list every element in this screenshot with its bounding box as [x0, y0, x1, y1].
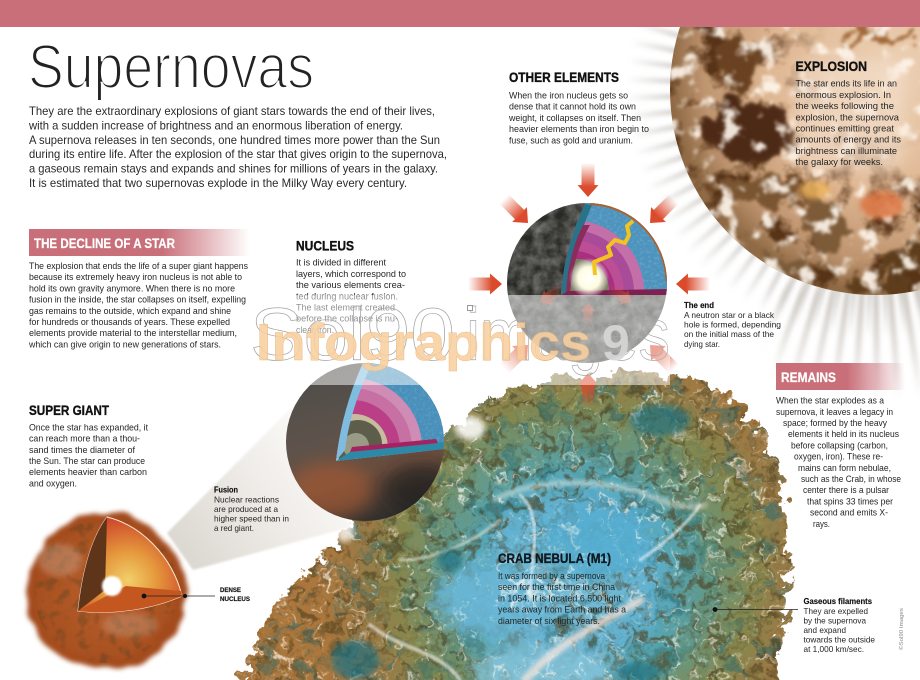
- body text: seen for the first time in China: [498, 581, 616, 592]
- body text: and oxygen.: [29, 477, 77, 488]
- body text: elements provide material to the interstellar medium,: [29, 327, 237, 338]
- body text: the galaxy for weeks.: [796, 156, 883, 167]
- grey numeral: 9: [602, 315, 630, 371]
- body text: explosion, the supernova: [796, 111, 900, 122]
- body text: [796, 78, 901, 167]
- label: gaseous filaments: at 1,000 km/sec.: [804, 644, 864, 654]
- body text: oxygen, iron). These re-: [794, 451, 883, 462]
- label: fusion: are produced at a: [214, 504, 278, 514]
- wedge layers: [336, 364, 444, 461]
- wedge walls: [336, 365, 370, 461]
- outlined watermark word: images: [466, 293, 670, 376]
- body text: elements heavier than carbon: [29, 466, 147, 477]
- intro text block: a gaseous remain stays and expands and shines for millions of years in the galaxy.: [29, 162, 438, 176]
- panel: other elements text: [508, 70, 649, 145]
- intro text block: They are the extraordinary explosions of giant stars towards the end of their lives,: [29, 105, 435, 118]
- body text: [776, 395, 901, 529]
- label: the end: hole is formed, depending: [684, 320, 781, 330]
- blue core: [435, 500, 653, 680]
- body text: mains can form nebulae,: [798, 462, 891, 473]
- body text: hold its own gravity anymore. When there is no more: [29, 282, 235, 293]
- label: gaseous filaments: towards the outside: [804, 635, 875, 645]
- credit: ©Sol90 Images: [898, 608, 905, 650]
- body text: [508, 90, 649, 145]
- body text: because its extremely heavy iron nucleus is not able to: [29, 271, 242, 282]
- label: fusion: a red giant.: [214, 523, 254, 533]
- super giant star cutaway: [27, 512, 215, 670]
- body text: second and emits X-: [810, 507, 888, 518]
- body text: diameter of six light years.: [498, 615, 600, 626]
- body text: It was formed by a supernova: [498, 570, 606, 581]
- dark brown blotches: [708, 30, 920, 293]
- label: dense nucleus: NUCLEUS: [220, 596, 251, 603]
- orange watermark: Infographics: [256, 314, 591, 372]
- label: gaseous filaments: by the supernova: [804, 616, 866, 626]
- body text: which can give origin to new generations of stars.: [28, 338, 221, 349]
- body text: rays.: [813, 518, 830, 529]
- pointer: gaseous filaments: [713, 607, 798, 612]
- middle sphere cutaway: [286, 363, 444, 521]
- title: Supernovas: [28, 33, 314, 102]
- label: gaseous filaments: [804, 596, 875, 654]
- label: the end: dying star.: [684, 339, 720, 349]
- dark teal patches: [331, 404, 690, 680]
- body text: such as the Crab, in whose: [801, 473, 901, 484]
- heading: REMAINS: [781, 370, 836, 385]
- body text: fuse, such as gold and uranium.: [509, 134, 633, 145]
- body text: can reach more than a thou-: [29, 433, 140, 444]
- body text: The explosion that ends the life of a super giant happens: [29, 260, 248, 271]
- label: gaseous filaments: Gaseous filaments: [804, 596, 872, 606]
- body text: [296, 257, 406, 335]
- body text: continues emitting great: [796, 122, 894, 134]
- body text: It is divided in different: [296, 257, 386, 268]
- center sphere cutaway: [507, 203, 667, 363]
- intro text block: [28, 105, 447, 190]
- outlined watermark brand: Sol90: [250, 293, 455, 376]
- body text: brightness can illuminate: [796, 145, 897, 156]
- body text: amounts of energy and its: [796, 134, 901, 145]
- crab nebula: [236, 372, 788, 680]
- surface shading: [288, 462, 456, 518]
- panel: nucleus text: [296, 238, 406, 335]
- label: fusion: Nuclear reactions: [214, 494, 279, 504]
- label: dense nucleus: [220, 587, 251, 603]
- zoom cone: [167, 403, 350, 570]
- body text: that spins 33 times per: [807, 495, 893, 506]
- body text: gas remains to the outside, which expand and shine: [29, 305, 231, 316]
- body text: the weeks following the: [796, 100, 894, 111]
- small marker square: [468, 306, 472, 310]
- body text: enormous explosion. In: [796, 89, 891, 100]
- orange flare: [860, 191, 904, 219]
- top band: [0, 0, 920, 27]
- heading: THE DECLINE OF A STAR: [34, 236, 175, 251]
- heading: NUCLEUS: [296, 238, 354, 254]
- body text: When the iron nucleus gets so: [509, 90, 628, 100]
- body text: before the collapse is nu-: [296, 313, 398, 324]
- glowing core: [569, 258, 609, 298]
- heading: OTHER ELEMENTS: [509, 70, 619, 85]
- body text: layers, which correspond to: [296, 268, 406, 279]
- watermark band: [250, 295, 670, 385]
- body text: the Sun. The star can produce: [29, 455, 145, 466]
- glow behind explosion text: [795, 60, 905, 170]
- cutaway wedge: [78, 517, 182, 612]
- label: the end: The end: [684, 300, 714, 310]
- panel: explosion text: [796, 59, 901, 167]
- body text: fusion in the inside, the star collapses on itself, expelling: [29, 294, 246, 305]
- panel: super giant text: [29, 403, 148, 488]
- heading: CRAB NEBULA (M1): [498, 551, 611, 566]
- body text: The star ends its life in an: [796, 78, 897, 89]
- intro text block: It is estimated that two supernovas explode in the Milky Way every century.: [29, 177, 407, 190]
- body text: supernova, it leaves a legacy in: [776, 406, 893, 417]
- body text: before collapsing (carbon,: [791, 439, 888, 450]
- body text: [29, 421, 148, 488]
- label: fusion: higher speed than in: [214, 514, 289, 524]
- pointer: dense nucleus: [142, 594, 215, 598]
- body text: Once the star has expanded, it: [29, 421, 148, 432]
- body text: weight, it collapses on itself. Then: [508, 112, 641, 123]
- body text: space; formed by the heavy: [783, 417, 887, 428]
- body text: in 1054. It is located 6,500 light: [498, 592, 621, 603]
- body text: When the star explodes as a: [776, 395, 885, 406]
- explosion star with rays: [620, 0, 920, 345]
- body text: center there is a pulsar: [803, 484, 889, 495]
- watermark text: [250, 293, 670, 376]
- panel: remains: [776, 363, 905, 529]
- body text: dense that it cannot hold its own: [509, 101, 636, 112]
- label: the end: [684, 300, 781, 349]
- label: the end: A neutron star or a black: [684, 310, 775, 320]
- body text: years away from Earth and has a: [498, 604, 627, 615]
- body text: heavier elements than iron begin to: [509, 123, 649, 134]
- body text: for hundreds or thousands of years. These expelled: [29, 316, 230, 327]
- body text: clear iron.: [296, 324, 334, 335]
- heading bar: [776, 363, 905, 390]
- heading: EXPLOSION: [796, 59, 867, 74]
- panel: the decline of a star: [28, 229, 250, 349]
- body text: the various elements crea-: [296, 279, 405, 290]
- intro text block: during its entire life. After the explosion of the star that gives origin to the supernova,: [29, 148, 447, 161]
- label: the end: on the initial mass of the: [684, 329, 774, 339]
- panel: crab nebula text: [498, 551, 627, 626]
- label: dense nucleus: DENSE: [220, 587, 242, 594]
- heading: SUPER GIANT: [29, 403, 110, 418]
- body text: [498, 570, 627, 626]
- body text: [28, 260, 248, 349]
- label: gaseous filaments: and expand: [804, 625, 846, 635]
- arrows converging on center sphere: [468, 163, 710, 407]
- body text: ted during nuclear fusion.: [296, 290, 398, 301]
- intro text block: with a sudden increase of brightness and an enormous liberation of energy.: [28, 120, 403, 132]
- nebula white filaments and clouds: [336, 416, 705, 680]
- wedge layers: [561, 203, 667, 295]
- body text: The last element created: [296, 302, 395, 312]
- label: gaseous filaments: They are expelled: [804, 606, 868, 616]
- heading bar: [29, 229, 250, 256]
- wedge walls and rim: [561, 204, 592, 295]
- yellow energy line: [594, 221, 633, 275]
- label: fusion: Fusion: [214, 485, 238, 495]
- body text: elements it held in its nucleus: [788, 428, 899, 439]
- intro text block: A supernova releases in ten seconds, one hundred times more power than the Sun: [29, 134, 440, 147]
- label: fusion: [214, 485, 289, 533]
- body text: sand times the diameter of: [29, 444, 135, 455]
